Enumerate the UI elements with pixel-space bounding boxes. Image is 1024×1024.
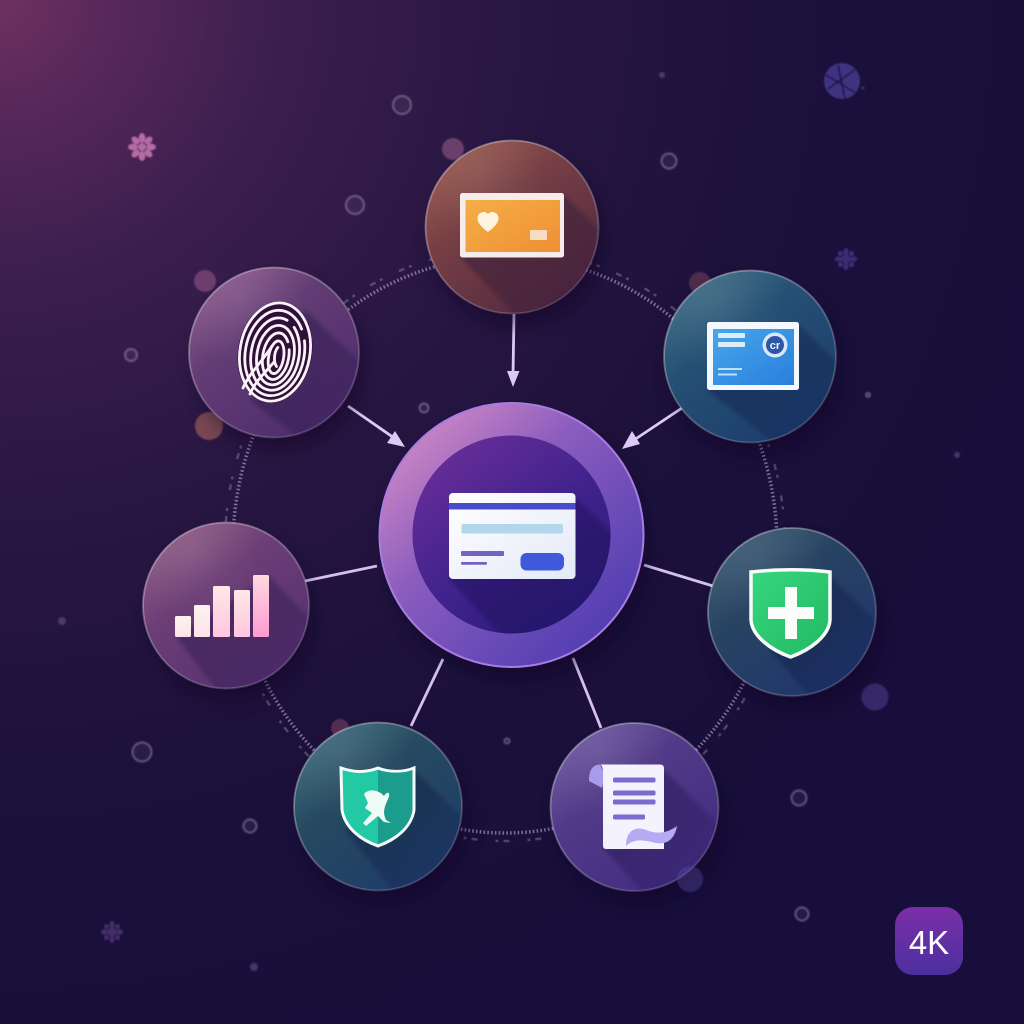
dashed orbit ring <box>225 249 785 841</box>
connector line: document to hub <box>573 658 601 728</box>
badge: 4K <box>895 907 963 975</box>
icon: blue card with emblem: cr <box>770 340 781 352</box>
bubble over document node <box>677 866 703 892</box>
connector line: bars to hub <box>305 566 377 581</box>
decorative bubbles <box>58 72 960 971</box>
node: orange heart card <box>424 140 606 338</box>
icon: payment card <box>449 493 576 579</box>
connector arrow: top to hub <box>507 314 520 387</box>
node: signal bars <box>142 522 318 700</box>
icon: teal shield emblem <box>341 768 414 846</box>
icon: scroll document <box>589 764 677 849</box>
node: teal shield <box>294 722 490 902</box>
icon: bar chart <box>175 575 269 637</box>
node: document scroll <box>548 722 720 900</box>
icon: orange card with heart <box>460 193 564 258</box>
connector line: teal shield to hub <box>411 659 443 726</box>
node: blue id card <box>663 270 838 460</box>
connector arrow: fingerprint to hub <box>348 406 405 447</box>
icon: green shield with plus <box>751 570 830 657</box>
badge: 4K: 4K <box>909 924 949 961</box>
connector arrow: blue card to hub <box>622 408 682 449</box>
node: health shield <box>707 527 878 705</box>
connector line: health shield to hub <box>644 565 713 586</box>
node: fingerprint <box>188 266 365 454</box>
central hub <box>376 402 658 676</box>
icon: blue card with emblem <box>707 322 799 390</box>
decorative flowers <box>101 63 860 943</box>
icon: fingerprint <box>230 295 320 409</box>
